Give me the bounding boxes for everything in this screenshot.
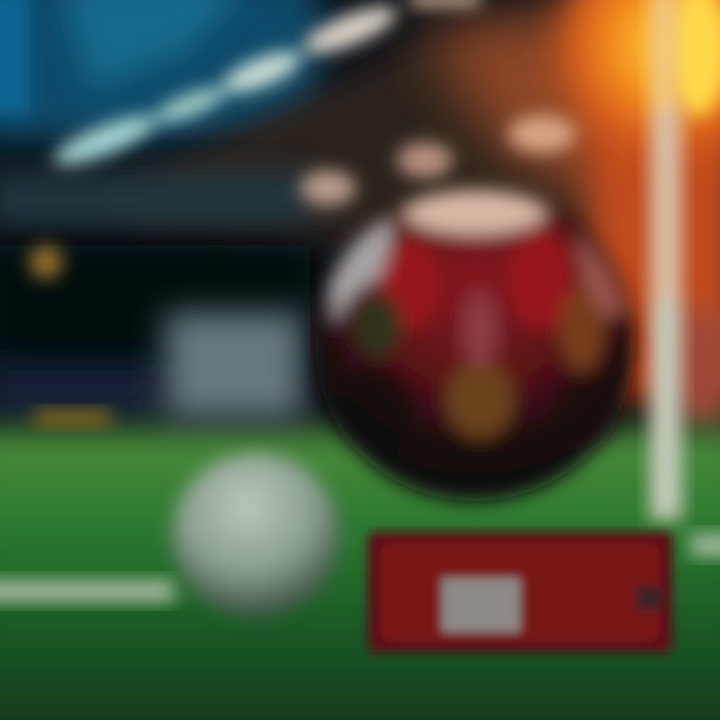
stadium lights: [29, 115, 576, 279]
pitch: [0, 410, 720, 720]
goal post: [650, 0, 682, 520]
sunset glow: [545, 0, 720, 430]
base plaque: [442, 578, 520, 632]
background goal: [165, 312, 303, 418]
small white ball: [172, 453, 340, 617]
floodlight strip: [49, 0, 480, 174]
red base: [368, 532, 672, 652]
trophy ball: [315, 189, 635, 501]
